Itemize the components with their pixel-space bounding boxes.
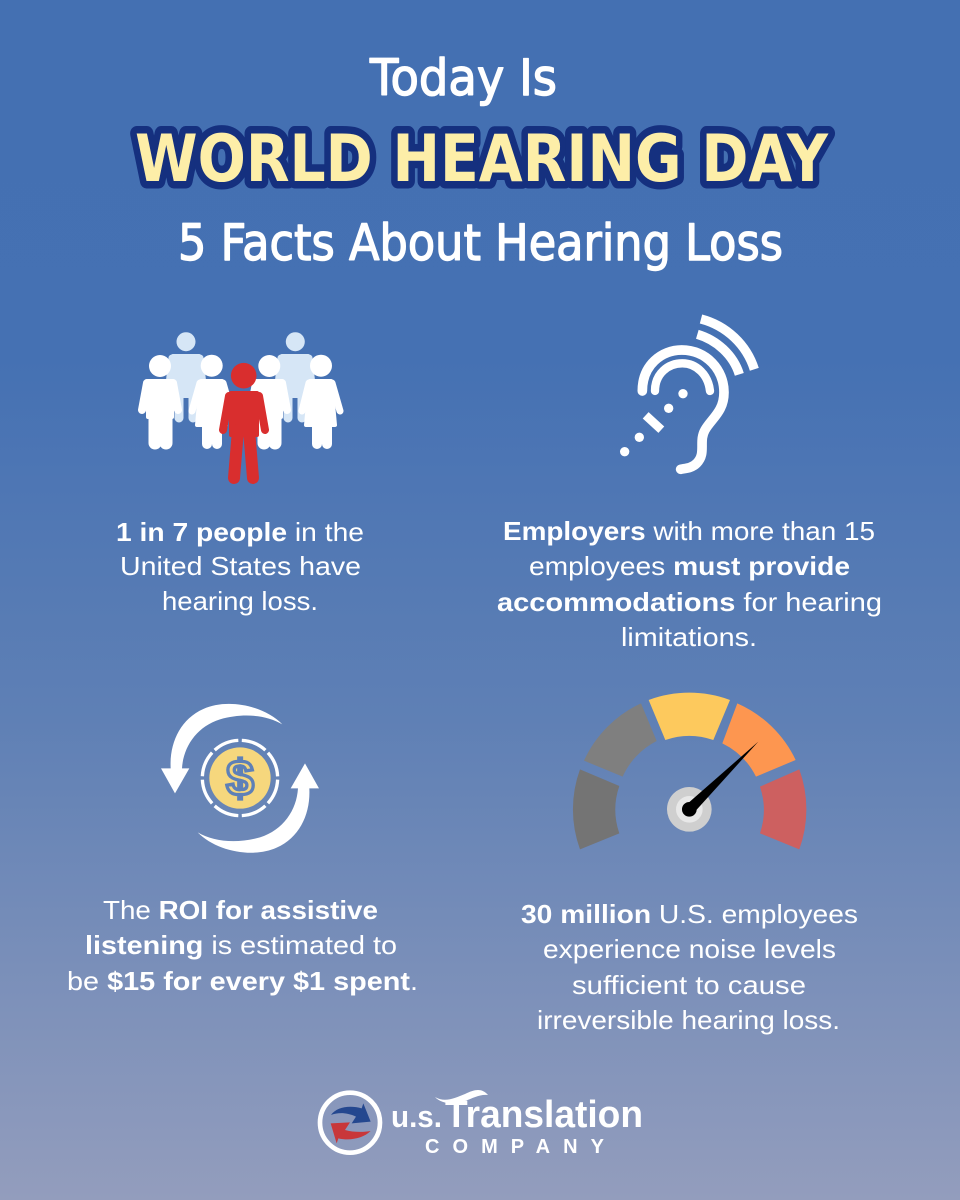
subtitle: 5 Facts About Hearing Loss: 5 Facts About Hearing Loss <box>178 214 783 272</box>
logo emblem <box>320 1093 380 1153</box>
icon: money cycle with dollar coin <box>161 704 319 853</box>
logo: U.S. Translation Company <box>320 1090 643 1158</box>
fact 3 text: listening is estimated to <box>85 930 397 960</box>
fact 4 text <box>521 899 858 1035</box>
back row figures <box>168 332 313 418</box>
fact 1 text: hearing loss. <box>162 586 318 616</box>
fact 2 text: employees must provide <box>529 551 850 581</box>
fact 2 text: Employers with more than 15 <box>503 516 875 546</box>
logo: U.S. Translation Company: COMPANY <box>425 1136 605 1158</box>
icon: noise level gauge <box>573 693 806 849</box>
fact 2 text: limitations. <box>621 622 757 652</box>
logo wordmark: u.s. <box>391 1099 442 1134</box>
fact 3 text: The ROI for assistive <box>103 895 378 925</box>
front row white figures <box>142 355 340 444</box>
fact 1 text <box>116 517 364 616</box>
fact 4 text: 30 million U.S. employees <box>521 899 858 929</box>
icon: group of people with one in red <box>142 332 340 478</box>
fact 4 text: sufficient to cause <box>572 970 806 1000</box>
fact 2 text <box>497 516 882 652</box>
fact 4 text: irreversible hearing loss. <box>537 1005 840 1035</box>
title: Today Is: Today Is <box>369 49 557 107</box>
red figure <box>223 363 265 478</box>
fact 4 text: experience noise levels <box>543 934 836 964</box>
fact 1 text: 1 in 7 people in the <box>116 517 364 547</box>
title: World Hearing Day: WORLD HEARING DAY <box>135 122 829 197</box>
fact 3 text: be $15 for every $1 spent . <box>67 966 418 996</box>
fact 1 text: United States have <box>120 551 361 581</box>
logo: U.S. Translation Company: Translation <box>445 1094 643 1136</box>
fact 3 text <box>67 895 418 996</box>
icon: money cycle with dollar coin: $ <box>226 750 254 806</box>
fact 2 text: accommodations for hearing <box>497 587 882 617</box>
icon: assistive listening ear <box>620 319 754 469</box>
